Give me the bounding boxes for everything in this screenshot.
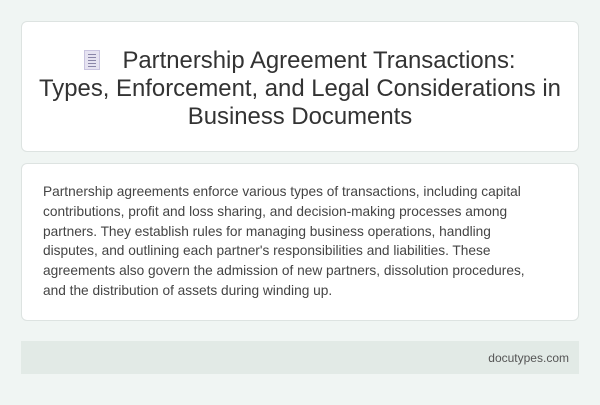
footer text: docutypes.com [488,351,569,365]
text block: and the distribution of assets during winding up. [43,283,332,298]
title: Partnership Agreement Transactions: [122,47,516,74]
title: Types, Enforcement, and Legal Considerations in [39,75,561,102]
panel: description [21,163,579,321]
title: Business Documents [188,103,412,130]
text block: Partnership agreements enforce various types of transactions, including capital [43,184,521,199]
icon: document [84,50,100,70]
text block: disputes, and outlining each partner's responsibilities and liabilities. These [43,243,490,258]
text block: contributions, profit and loss sharing, and decision-making processes among [43,204,507,219]
footer [21,341,579,374]
title [39,47,561,130]
text block [43,184,525,298]
text block: partners. They establish rules for managing business operations, handling [43,224,491,239]
panel: title card [21,21,579,152]
text block: agreements also govern the admission of new partners, dissolution procedures, [43,263,525,278]
